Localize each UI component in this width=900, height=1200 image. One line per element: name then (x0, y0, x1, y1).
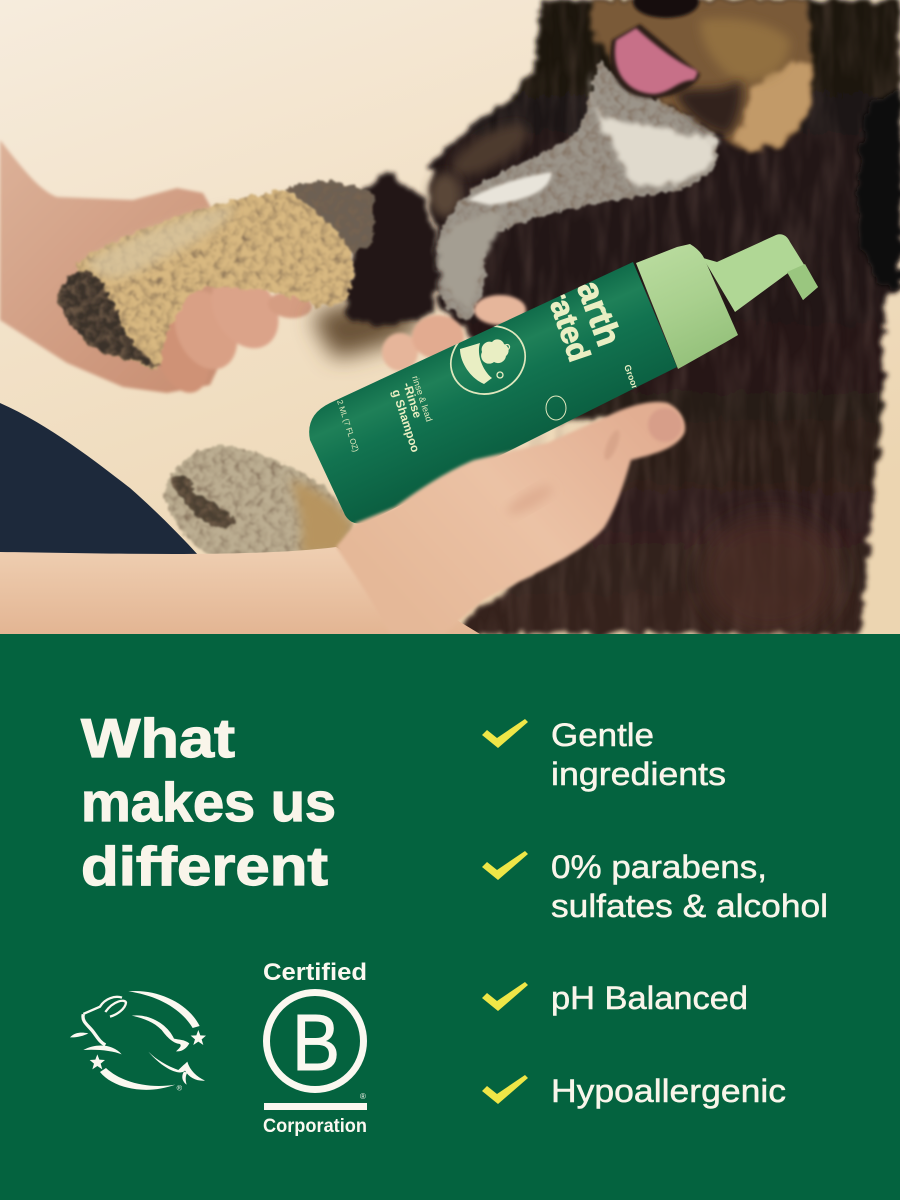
finger 2 (175, 292, 238, 370)
feature text: Gentle (551, 717, 654, 753)
bottle text: shampoo: g Shampoo (389, 388, 423, 454)
paw dark toes (58, 271, 160, 368)
feature: no parabens (482, 849, 828, 924)
bottle text: product name: rinse & lead (410, 375, 434, 423)
icon hand (460, 343, 492, 384)
bottle icon: foam circle (440, 314, 536, 406)
finger behind bottle 1 (382, 333, 418, 371)
upper hand: arm and fingers (0, 140, 313, 400)
B circle (266, 992, 364, 1090)
rabbit hind leg (148, 1052, 205, 1081)
check icon (482, 982, 528, 1011)
bottle surface (290, 240, 690, 540)
feature text: 0% parabens, (551, 849, 767, 885)
finger 4 (270, 293, 314, 320)
paw grey band (285, 181, 375, 255)
B Corp certification logo (263, 959, 367, 1137)
paw dark core near leg (345, 173, 440, 324)
dog head highlight: golden fur (735, 64, 811, 148)
dog chest white patch (590, 72, 716, 188)
green panel (0, 634, 900, 1200)
bottle brand: earth: earth (562, 257, 628, 351)
dog head: brown fur (592, 0, 813, 148)
rabbit tail foot (182, 1072, 187, 1085)
corporation label: Corporation (263, 1116, 367, 1137)
held paw: tan and dark fur (58, 173, 440, 370)
forearm and palm (0, 140, 218, 395)
photo background: warm cream wall and floor (0, 0, 900, 634)
rabbit front paw upper (70, 1033, 88, 1037)
rabbit second ear (105, 1001, 126, 1017)
lower paw: curly fur (164, 445, 353, 556)
palm shadow (503, 480, 557, 520)
dog lower grey patch (439, 210, 505, 310)
thumb nail (648, 408, 682, 442)
bottle brand: rated: rated (539, 283, 597, 366)
bottle icon: small circle (546, 396, 566, 420)
jeans: navy knee (0, 403, 199, 556)
check icon (482, 719, 528, 748)
dog chest: mottled grey and white fur (435, 60, 718, 320)
bottle text: rinse: -Rinse (400, 381, 425, 420)
bottle cap: light green (636, 244, 738, 369)
leaping bunny logo (70, 991, 206, 1092)
rabbit head and chest (83, 1014, 105, 1045)
heading: What makes us different (81, 707, 336, 897)
rabbit front paw lower (83, 1045, 122, 1054)
dog chin: dark fur (675, 80, 741, 135)
dog right ear: black fur (858, 90, 900, 289)
dog left brown tuft (450, 122, 530, 178)
finger 3 (212, 287, 280, 350)
registered mark: ® (177, 1083, 183, 1092)
feature: hypoallergenic (482, 1073, 786, 1109)
finger 1 (181, 385, 203, 394)
dog nose (633, 0, 699, 18)
top arc (128, 991, 200, 1028)
dog lower brown sheen (700, 515, 840, 635)
dog white streak (468, 172, 552, 205)
feature: gentle ingredients (482, 717, 726, 792)
nozzle tip (787, 264, 818, 300)
rabbit back and haunch (132, 1015, 189, 1051)
icon ring (440, 314, 536, 406)
dog fur strands (430, 0, 900, 634)
paw tan fur (77, 190, 353, 370)
heading: What makes us different: What (81, 707, 235, 769)
lower hand: palm and thumb over bottle (336, 402, 685, 634)
dog lower left tuft (429, 173, 461, 217)
B letter: B (292, 998, 340, 1087)
finger behind bottle 3 (474, 295, 526, 325)
certified label: Certified (263, 959, 367, 986)
lower paw dark markings (172, 475, 236, 527)
right star (191, 1030, 206, 1045)
icon foam (481, 339, 509, 364)
bottle text: grooming: Grooming (622, 363, 646, 407)
feature text: pH Balanced (551, 980, 748, 1016)
divider bar (264, 1103, 367, 1110)
bottle text: volume: 2 ML (7 FL OZ) (335, 399, 360, 453)
dog mouth shadow (610, 24, 700, 98)
feature text: ingredients (551, 756, 726, 792)
bottle: green body (290, 240, 690, 540)
dog tongue (615, 28, 697, 94)
heading: What makes us different: different (81, 835, 328, 897)
lower arm: forearm (0, 547, 480, 634)
feature list (482, 717, 828, 1109)
photo: dog paw and shampoo bottle (0, 0, 900, 635)
nozzle: pump head (703, 234, 818, 312)
fingers behind bottle (382, 295, 526, 371)
check icon (482, 851, 528, 880)
registered mark: ® (360, 1092, 366, 1101)
heading: What makes us different: makes us (81, 771, 336, 833)
feature: pH balanced (482, 980, 748, 1016)
lower paw base: grey curls (164, 445, 353, 556)
dog head upper highlight (700, 18, 790, 81)
lower paw tan side (290, 480, 353, 555)
dog body: dark fur (430, 0, 900, 634)
check icon (482, 1075, 528, 1104)
finger behind bottle 2 (412, 315, 464, 359)
left star (90, 1054, 105, 1069)
icon bubbles (504, 344, 510, 350)
thumb knuckle crease (601, 428, 623, 462)
rabbit head top and ear (83, 997, 122, 1014)
paw light fur (85, 205, 235, 278)
feature text: Hypoallergenic (551, 1073, 786, 1109)
feature text: sulfates & alcohol (551, 888, 828, 924)
paw lower leg hair: blurred brown (312, 303, 425, 358)
bottom arc (100, 1068, 175, 1090)
